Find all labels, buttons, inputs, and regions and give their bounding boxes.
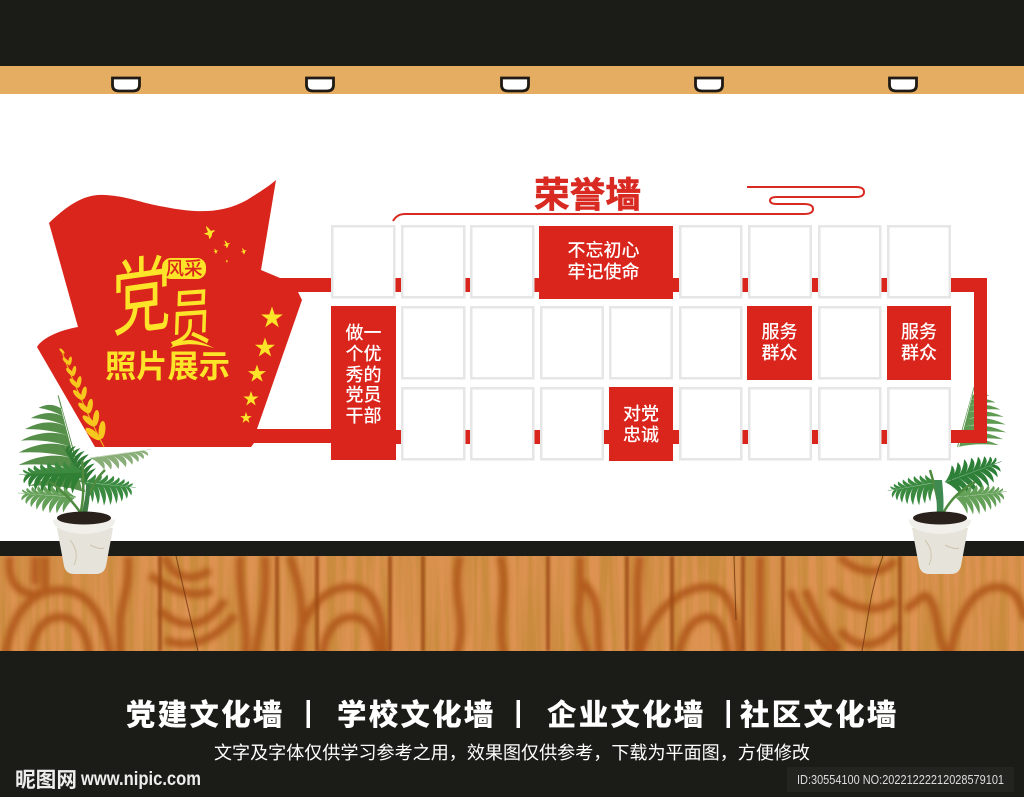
upper fronds behind frame [957,387,1015,458]
red panel: 服务群众 (center): 群众 [762,343,798,363]
watermark logo: 昵图网 [15,769,77,792]
red panel: 做一个优秀的党员干部: 做一 [346,323,382,343]
red panel: 对党忠诚: 对党 [623,404,659,424]
five stars [240,306,283,423]
flag shape [37,180,331,447]
red panel: 服务群众 (right): 群众 [901,343,937,363]
red panel: 不忘初心: 不忘初心 [568,240,640,260]
watermark logo [15,769,201,792]
red panel: 做一个优秀的党员干部: 个优 [346,344,382,364]
ceiling spotlights [112,78,916,91]
photo frames grid [332,226,950,459]
plant stems [50,460,105,515]
flower pot [53,512,115,574]
plant fronds [886,448,1010,517]
flying birds [204,226,246,263]
red panel: 做一个优秀的党员干部 [331,306,396,460]
red panel: 对党忠诚 [609,387,673,461]
disclaimer text: 文字及字体仅供学习参考之用，效果图仅供参考，下载为平面图，方便修改 [214,743,810,763]
red panel: 做一个优秀的党员干部: 干部 [346,406,382,426]
watermark logo: www.nipic.com [80,769,201,790]
wheat ear [59,348,106,447]
red connector bracket [951,278,987,443]
caption: wall types: 企业文化墙 [547,698,706,732]
caption: wall types [126,698,899,732]
red panel: 服务群众 (center) [747,306,812,380]
caption: wall types: 社区文化墙 [740,698,899,732]
heading: 照片展示: 照片展示 [105,348,230,384]
caption: wall types: 学校文化墙 [337,698,496,732]
red panel: 服务群众 (center): 服务 [762,322,798,342]
red panel: 不忘初心 [539,226,673,299]
flower pot [909,512,971,574]
ceiling strip [0,66,1024,94]
red panel: 不忘初心: 牢记使命 [568,261,640,282]
left potted plant [4,395,153,574]
calligraphy: 党员: 员 [168,283,214,355]
calligraphy: 党员: 党 [112,248,171,348]
right potted plant [886,387,1015,574]
plant stems [930,470,975,515]
red panel: 做一个优秀的党员干部: 秀的 [346,365,382,385]
red panel: 服务群众 (right): 服务 [901,322,937,342]
caption: wall types: 党建文化墙 [126,698,285,732]
red panel: 对党忠诚: 忠诚 [623,425,659,445]
calligraphy: 党员 [112,248,214,355]
wood floor [0,556,1024,660]
red panel: 服务群众 (right) [887,306,951,380]
plant fronds [4,395,153,515]
red panel: 做一个优秀的党员干部: 党员 [346,385,382,405]
cloud line ornament [393,187,864,221]
red flag emblem [37,180,331,447]
title: 荣誉墙: 荣誉墙 [534,175,641,215]
image id tag [787,767,1014,792]
badge: 风采: 风采 [165,258,203,279]
red connector tabs [395,278,888,444]
